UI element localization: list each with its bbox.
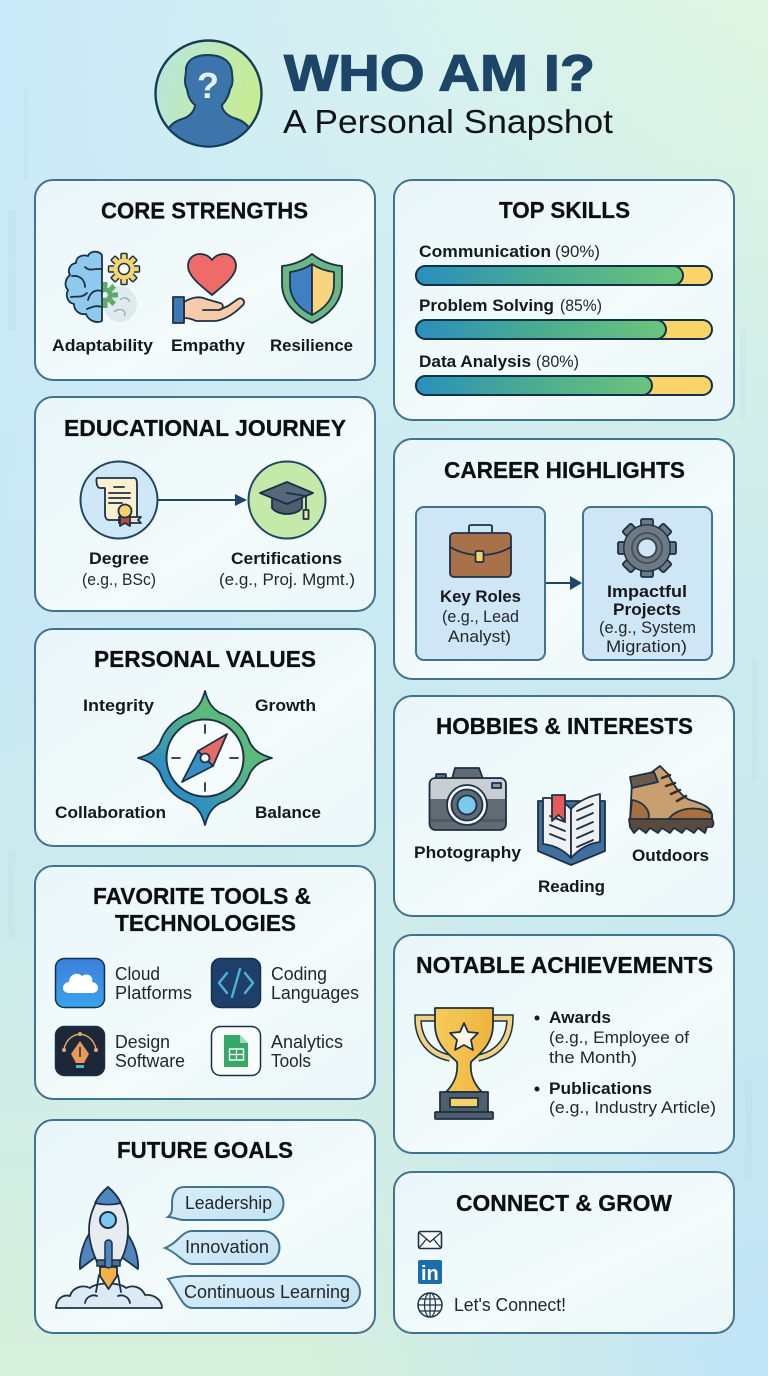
text: analytics tools: [271, 1032, 343, 1071]
icon: trophy: [418, 1008, 510, 1119]
panel: educational journey: [35, 397, 375, 611]
heading: personal values: PERSONAL VALUES: [94, 646, 316, 672]
text: analytics tools: Analytics: [271, 1032, 343, 1052]
icon: compass: [138, 691, 272, 825]
icon: anonymous person avatar: ?: [197, 65, 219, 106]
label: balance: Balance: [255, 803, 321, 822]
icon: gear: [618, 519, 676, 577]
text: impactful projects: Impactful: [607, 582, 687, 601]
label: certifications: (e.g., Proj. Mgmt.): [219, 570, 355, 589]
panel: hobbies and interests: [394, 696, 734, 916]
list: publications: (e.g., Industry Article): [549, 1098, 716, 1117]
heading: career highlights: CAREER HIGHLIGHTS: [444, 457, 685, 483]
list: publications: [534, 1079, 716, 1117]
heading: top skills: TOP SKILLS: [499, 197, 630, 223]
label: reading: Reading: [538, 877, 605, 896]
panel: connect and grow: [394, 1172, 734, 1333]
skill: data analysis 80%: Data Analysis: [419, 352, 531, 371]
title: WHO AM I?: [284, 44, 595, 102]
icon: linkedin: [418, 1260, 442, 1285]
panel: career highlights: [394, 439, 734, 679]
panel: core strengths: [35, 180, 375, 380]
heading: favorite tools and technologies: TECHNOLOGIES: [115, 910, 296, 936]
panel: personal values: [35, 629, 375, 846]
text: design software: Software: [115, 1051, 185, 1071]
label: degree: [82, 549, 156, 589]
label: integrity: Integrity: [83, 696, 155, 715]
list: awards: Awards: [549, 1008, 611, 1027]
label: photography: Photography: [414, 843, 522, 862]
arrow: degree to certifications: [158, 494, 247, 506]
icon: globe: [418, 1293, 442, 1317]
list: awards: the Month): [549, 1048, 637, 1067]
panel: favorite tools and technologies: [35, 866, 375, 1099]
panel: top skills: [394, 180, 734, 420]
text: coding languages: [271, 964, 359, 1003]
bubble: continuous learning: [168, 1276, 360, 1308]
icon: anonymous person avatar: [155, 40, 262, 160]
skill: problem solving 85%: (85%): [560, 296, 602, 315]
label: resilience: Resilience: [270, 336, 353, 355]
text: impactful projects: [599, 582, 696, 656]
card: impactful projects: [583, 507, 712, 660]
icon: briefcase: [450, 525, 511, 577]
heading: core strengths: CORE STRENGTHS: [101, 198, 308, 224]
label: adaptability: Adaptability: [52, 336, 154, 355]
heading: connect and grow: CONNECT & GROW: [456, 1190, 672, 1216]
heading: favorite tools and technologies: FAVORITE TOOLS &: [93, 883, 311, 909]
icon: design software: [56, 1026, 104, 1076]
text: key roles: (e.g., Lead: [442, 607, 519, 626]
icon: linkedin: in: [421, 1263, 439, 1285]
heading: notable achievements: NOTABLE ACHIEVEMENTS: [416, 952, 713, 978]
text: coding languages: Coding: [271, 964, 327, 984]
card: key roles: [416, 507, 545, 660]
bubble: leadership: Leadership: [185, 1193, 272, 1213]
icon: diploma scroll: [80, 462, 158, 538]
label: degree: Degree: [89, 549, 149, 568]
icon: hiking boot: [629, 766, 714, 833]
text: design software: [115, 1032, 185, 1071]
icon: heart in hand: [173, 254, 244, 323]
heading: educational journey: EDUCATIONAL JOURNEY: [64, 415, 346, 441]
subtitle: A Personal Snapshot: [283, 103, 613, 140]
text: cloud platforms: [115, 964, 192, 1003]
label: empathy: Empathy: [171, 336, 246, 355]
label: outdoors: Outdoors: [632, 846, 709, 865]
panel: notable achievements: [394, 935, 734, 1153]
icon: open book: [538, 794, 605, 865]
heading: future goals: FUTURE GOALS: [117, 1137, 293, 1163]
text: analytics tools: Tools: [271, 1051, 311, 1071]
icon: email: [418, 1232, 442, 1248]
skill: data analysis 80%: [416, 352, 712, 395]
text: impactful projects: Projects: [613, 600, 681, 619]
icon: shield: [282, 254, 342, 323]
icon: cloud platforms: [56, 958, 104, 1008]
skill: problem solving 85%: Problem Solving: [419, 296, 554, 315]
text: cloud platforms: Platforms: [115, 983, 192, 1003]
text: impactful projects: Migration): [606, 637, 687, 656]
icon: brain and gears: [66, 252, 140, 322]
list: awards: (e.g., Employee of: [549, 1028, 689, 1047]
panel: future goals: [35, 1120, 375, 1333]
text: design software: Design: [115, 1032, 170, 1052]
heading: hobbies and interests: HOBBIES & INTERESTS: [436, 713, 693, 739]
icon: coding languages: [212, 958, 260, 1008]
icon: analytics tools: [212, 1026, 260, 1076]
bubble: leadership: [168, 1187, 284, 1220]
text: key roles: Key Roles: [440, 587, 521, 606]
heading: favorite tools and technologies: [93, 883, 311, 936]
text: cloud platforms: Cloud: [115, 964, 160, 984]
list: publications: Publications: [549, 1079, 652, 1098]
label: collaboration: Collaboration: [55, 803, 166, 822]
text: let's connect: Let's Connect!: [454, 1295, 566, 1315]
text: impactful projects: (e.g., System: [599, 618, 696, 637]
text: key roles: [440, 587, 521, 646]
icon: rocket launch: [56, 1187, 162, 1308]
skill: communication 90%: (90%): [555, 242, 600, 261]
list: awards: [534, 1008, 689, 1067]
icon: graduation cap: [248, 462, 326, 538]
header: [155, 40, 613, 160]
label: growth: Growth: [255, 696, 316, 715]
text: key roles: Analyst): [448, 627, 511, 646]
text: coding languages: Languages: [271, 983, 359, 1003]
bubble: innovation: [165, 1231, 280, 1264]
label: certifications: [219, 549, 355, 589]
bubble: continuous learning: Continuous Learning: [184, 1282, 350, 1302]
label: certifications: Certifications: [231, 549, 342, 568]
bubble: innovation: Innovation: [185, 1237, 269, 1257]
skill: communication 90%: Communication: [419, 242, 551, 261]
icon: camera: [430, 768, 506, 830]
skill: data analysis 80%: (80%): [536, 352, 579, 371]
label: degree: (e.g., BSc): [82, 570, 156, 589]
skill: problem solving 85%: [416, 296, 712, 339]
arrow: roles to projects: [546, 576, 582, 590]
skill: communication 90%: [416, 242, 712, 285]
